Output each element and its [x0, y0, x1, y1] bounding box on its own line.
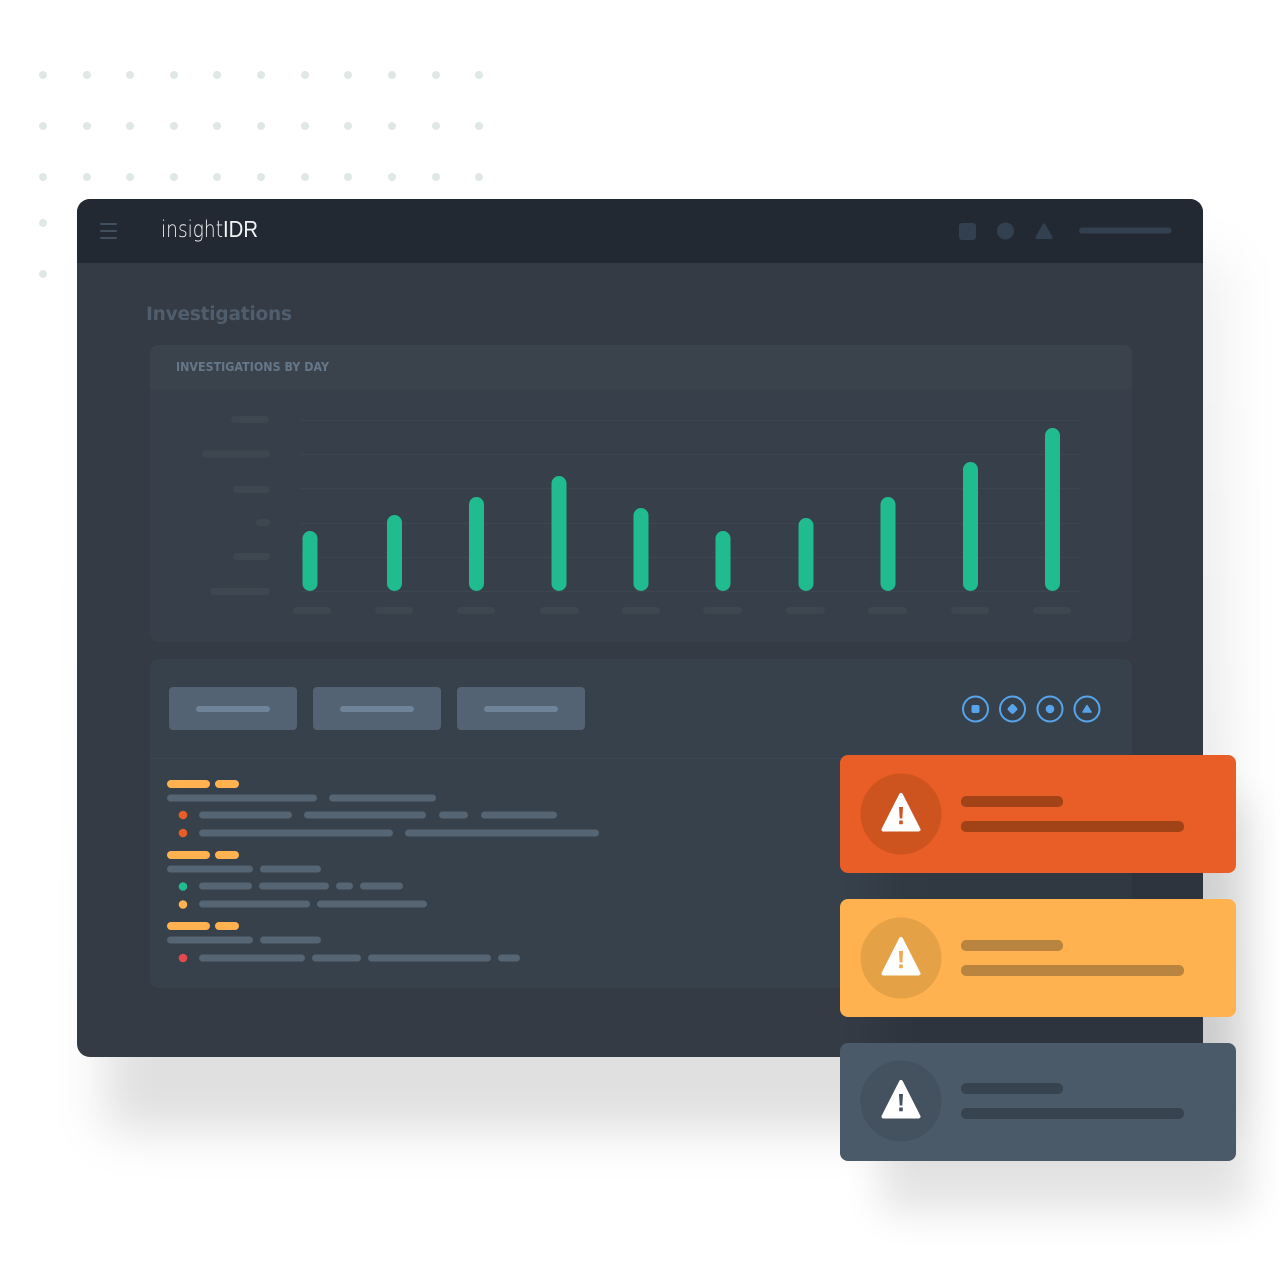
alert text lines	[961, 1083, 1184, 1119]
icon: warning	[860, 774, 942, 854]
alert text lines	[961, 940, 1184, 976]
panel: investigations by day	[150, 345, 1132, 642]
icon: warning	[860, 918, 942, 998]
top navigation bar	[77, 199, 1203, 263]
page heading: Investigations	[146, 304, 292, 325]
x axis labels	[293, 607, 1071, 614]
dashboard shadow	[105, 255, 1230, 1130]
log entry lines	[167, 780, 599, 962]
window body	[77, 199, 1203, 1057]
alert card: slate	[840, 1043, 1236, 1161]
alert text lines	[961, 796, 1184, 832]
icon: square	[959, 223, 976, 240]
logo: insightIDR: insightIDR	[161, 216, 258, 243]
icon: hamburger menu	[100, 223, 117, 239]
filter buttons	[169, 687, 585, 730]
alert cards shadow	[880, 800, 1250, 1212]
panel header	[150, 345, 1132, 389]
icon: circle	[997, 222, 1014, 240]
bars	[302, 428, 1060, 591]
icon: circled action buttons	[963, 696, 1100, 722]
panel: investigation list	[150, 659, 1132, 988]
dot grid background	[39, 71, 483, 278]
icon: triangle	[1037, 225, 1051, 238]
dashboard window	[77, 199, 1203, 1057]
alert card: yellow	[840, 899, 1236, 1017]
alert card: orange	[840, 755, 1236, 873]
bar chart	[202, 416, 1080, 614]
user name placeholder	[1079, 228, 1172, 234]
grid lines	[300, 420, 1080, 592]
icon: warning	[860, 1060, 942, 1142]
panel heading text: INVESTIGATIONS BY DAY	[176, 359, 330, 374]
y axis labels	[202, 416, 270, 595]
